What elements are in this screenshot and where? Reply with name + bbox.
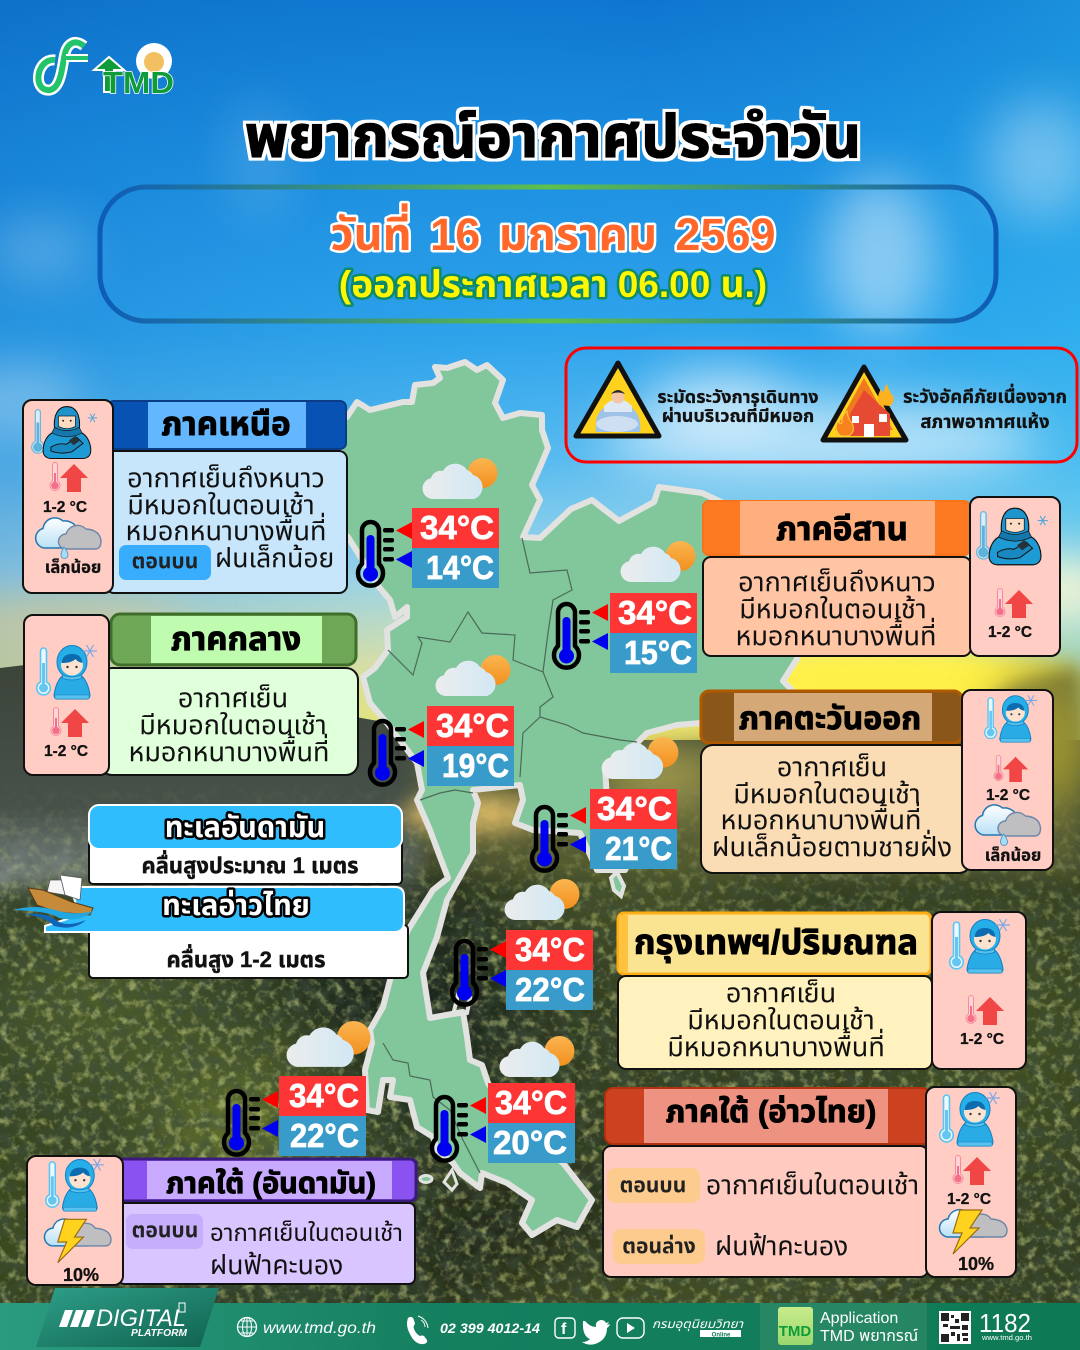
- label: light rain: เล็กน้อย: [985, 847, 1041, 865]
- temperatures: 22°C: [515, 971, 585, 1008]
- icon: cold child: [950, 919, 1010, 973]
- text: east forecast: อากาศเย็น: [777, 752, 887, 782]
- heading: northeast: [703, 501, 970, 555]
- issued time: (ออกประกาศเวลา 06.00 น.): [339, 264, 767, 305]
- card: south andaman icons: [27, 1156, 123, 1285]
- icon: thunderstorm: [44, 1219, 111, 1263]
- text: central forecast: [100, 668, 358, 775]
- cloud and sun icon: [500, 1036, 574, 1077]
- cloud and sun icon: [436, 655, 510, 696]
- temperatures: 34°C: [597, 790, 672, 827]
- heading: Gulf of Thailand: [45, 887, 404, 932]
- text: north forecast: มีหมอกในตอนเช้า: [127, 490, 315, 520]
- icon: light rain: [36, 518, 101, 558]
- phone: [407, 1316, 541, 1344]
- temperatures: [427, 706, 514, 786]
- application block: TMD พยากรณ์: [820, 1328, 918, 1345]
- digital platform badge: [36, 1288, 219, 1347]
- icon: bundled person: [977, 508, 1048, 565]
- heading: northeast: ภาคอีสาน: [776, 510, 908, 547]
- temperatures: 34°C: [436, 707, 509, 744]
- text: south gulf forecast: [603, 1146, 928, 1277]
- logo: TMD digital: TMD: [103, 65, 174, 100]
- warning text: fog: ผ่านบริเวณที่มีหมอก: [662, 403, 814, 426]
- icon: cold child: [940, 1092, 1000, 1146]
- text: central forecast: อากาศเย็น: [178, 683, 288, 713]
- text: north forecast: อากาศเย็นถึงหนาว: [127, 463, 325, 493]
- forecast block: north: [358, 458, 499, 588]
- body: Gulf wave height: [89, 925, 408, 978]
- text: north forecast: ฝนเล็กน้อย: [215, 543, 334, 573]
- label: storm chance: 10%: [958, 1254, 994, 1274]
- temperatures: 21°C: [605, 830, 672, 867]
- QR code: [939, 1311, 971, 1344]
- panel: Bangkok region: [618, 912, 1026, 1069]
- icon: temperature rise: [966, 996, 1004, 1025]
- text: north forecast: หมอกหนาบางพื้นที่: [125, 512, 327, 546]
- label: storm chance: 10%: [63, 1265, 99, 1285]
- text: south gulf forecast: อากาศเย็นในตอนเช้า: [706, 1170, 919, 1200]
- text: Bangkok forecast: มีหมอกในตอนเช้า: [687, 1005, 875, 1035]
- temperatures: 34°C: [495, 1084, 567, 1121]
- card: northeast icons: [970, 497, 1060, 656]
- card: north icons: [23, 400, 113, 593]
- temperatures: [590, 789, 677, 869]
- social icons: f: [561, 1321, 567, 1338]
- heading: Andaman sea: [89, 805, 402, 849]
- temperatures: 20°C: [493, 1124, 567, 1161]
- cloud and sun icon: [423, 458, 498, 499]
- panel: Gulf of Thailand: [13, 875, 408, 978]
- cloud and sun icon: [287, 1021, 370, 1067]
- temperatures: 34°C: [420, 509, 494, 546]
- warning text: fog: ระมัดระวังการเดินทาง: [657, 387, 819, 407]
- forecast block: northeast: [554, 541, 697, 673]
- warning panel: [566, 348, 1077, 462]
- text: south gulf forecast: ตอนบน: [620, 1174, 686, 1197]
- card: Bangkok icons: [932, 912, 1026, 1069]
- forecast block: upper south: [452, 879, 593, 1010]
- temperatures: 22°C: [290, 1117, 359, 1154]
- digital platform badge: DIGITAL: [96, 1305, 186, 1332]
- thermometer: [358, 522, 412, 586]
- panel: east region: [701, 690, 1053, 873]
- heading: Andaman sea: ทะเลอันดามัน: [165, 812, 325, 844]
- cloud and sun icon: [602, 737, 678, 779]
- label: light rain: เล็กน้อย: [45, 559, 101, 577]
- application block: TMD: [779, 1323, 811, 1340]
- website: [238, 1318, 376, 1337]
- application block: Application: [820, 1310, 898, 1327]
- heading: north: ภาคเหนือ: [161, 405, 291, 442]
- text: Bangkok forecast: มีหมอกหนาบางพื้นที่: [667, 1028, 885, 1062]
- heading: Bangkok: กรุงเทพฯ/ปริมณฑล: [634, 924, 918, 963]
- text: south andaman forecast: อากาศเย็นในตอนเช้า: [210, 1219, 403, 1247]
- text: northeast forecast: มีหมอกในตอนเช้า: [739, 594, 927, 624]
- temperatures: [610, 593, 697, 673]
- label: temperature rise: 1-2 °C: [960, 1031, 1004, 1048]
- icon: temperature rise: [50, 462, 88, 492]
- hotline 1182: www.tmd.go.th: [981, 1335, 1032, 1342]
- temperatures: 19°C: [442, 747, 509, 784]
- thermometer: [432, 1097, 486, 1161]
- panel: northeast region: [703, 497, 1060, 656]
- forecast block: south andaman: [224, 1021, 370, 1156]
- icon: cold child: [46, 1159, 104, 1211]
- text: east forecast: หมอกหนาบางพื้นที่: [720, 801, 922, 835]
- temperatures: 15°C: [624, 634, 692, 671]
- title: พยากรณ์อากาศประจำวัน: [245, 103, 861, 170]
- label: temperature rise: 1-2 °C: [43, 499, 87, 516]
- body: Gulf wave height: คลื่นสูง 1-2 เมตร: [167, 944, 325, 973]
- text: south gulf forecast: ตอนล่าง: [622, 1235, 696, 1258]
- thermometer: [370, 721, 424, 785]
- text: northeast forecast: อากาศเย็นถึงหนาว: [738, 567, 936, 597]
- icon: temperature rise: [51, 708, 89, 737]
- card: central icons: [24, 615, 109, 775]
- warning text: fire: ระวังอัคคีภัยเนื่องจาก: [903, 383, 1067, 407]
- text: Bangkok forecast: อากาศเย็น: [726, 978, 836, 1008]
- heading: south gulf: [605, 1088, 930, 1144]
- label: temperature rise: 1-2 °C: [988, 624, 1032, 641]
- temperatures: [506, 930, 593, 1010]
- footer bar: [0, 1288, 1080, 1350]
- logo: TMD digital: [38, 42, 174, 100]
- label: temperature rise: 1-2 °C: [44, 743, 88, 760]
- heading: central: ภาคกลาง: [171, 620, 301, 657]
- text: east forecast: [701, 745, 971, 873]
- body: Andaman wave height: คลื่นสูงประมาณ 1 เมตร: [141, 850, 359, 879]
- temperatures: 34°C: [618, 594, 692, 631]
- forecast block: east: [532, 737, 678, 871]
- text: Bangkok forecast: [618, 976, 932, 1069]
- heading: south andaman: ภาคใต้ (อันดามัน): [166, 1168, 376, 1200]
- thermometer: [554, 604, 608, 668]
- panel: south gulf region: [603, 1087, 1016, 1277]
- department name: กรมอุตุนิยมวิทยา: [652, 1317, 744, 1332]
- date box: [100, 187, 996, 321]
- digital platform badge: PLATFORM: [131, 1328, 188, 1339]
- thermometer: [452, 941, 506, 1005]
- temperatures: [279, 1076, 366, 1156]
- cloud and sun icon: [505, 879, 580, 920]
- forecast block: south gulf: [432, 1036, 575, 1163]
- heading: east: [701, 691, 962, 743]
- temperatures: [412, 508, 499, 588]
- temperatures: [488, 1083, 575, 1163]
- left hills: [0, 662, 430, 930]
- text: north forecast: ตอนบน: [132, 550, 198, 573]
- heading: north: [108, 401, 346, 449]
- icon: temperature rise: [994, 755, 1028, 782]
- department name: [652, 1317, 744, 1338]
- text: south andaman forecast: ตอนบน: [132, 1219, 198, 1242]
- card: east icons: [962, 690, 1053, 870]
- application block: [760, 1303, 927, 1350]
- body: Andaman wave height: [89, 840, 402, 884]
- panel: south andaman region: [27, 1156, 416, 1285]
- text: east forecast: ฝนเล็กน้อยตามชายฝั่ง: [712, 829, 952, 862]
- text: north forecast: [106, 451, 347, 593]
- temperatures: 34°C: [289, 1077, 359, 1114]
- text: south gulf forecast: ฝนฟ้าคะนอง: [715, 1231, 848, 1261]
- icon: cold child: [37, 645, 97, 699]
- department name: Online: [712, 1332, 731, 1338]
- heading: Bangkok: [618, 913, 931, 974]
- heading: central: [111, 614, 356, 665]
- icon: ship: [13, 875, 93, 928]
- website: www.tmd.go.th: [263, 1320, 376, 1337]
- map of Thailand: [340, 362, 800, 1235]
- icon: thunderstorm: [939, 1210, 1007, 1254]
- panel: Andaman sea: [89, 805, 402, 884]
- icon: temperature rise: [953, 1156, 991, 1185]
- icon: cold child: [985, 695, 1037, 742]
- warning text: fog: [657, 387, 819, 426]
- forecast block: central: [370, 655, 514, 786]
- cloud and sun icon: [621, 541, 696, 582]
- icon: fog driving warning: [576, 363, 659, 436]
- thermometer: [224, 1091, 278, 1155]
- text: central forecast: มีหมอกในตอนเช้า: [139, 710, 327, 740]
- heading: south gulf: ภาคใต้ (อ่าวไทย): [666, 1094, 876, 1129]
- panel: central region: [24, 614, 358, 775]
- warning text: fire: [903, 383, 1067, 432]
- thermometer: [532, 807, 586, 871]
- heading: south andaman: [118, 1159, 416, 1201]
- text: northeast forecast: [703, 557, 971, 656]
- social icons: [555, 1318, 644, 1345]
- card: south gulf icons: [926, 1087, 1016, 1277]
- label: temperature rise: 1-2 °C: [986, 787, 1030, 804]
- temperatures: 14°C: [426, 549, 494, 586]
- label: temperature rise: 1-2 °C: [947, 1191, 991, 1208]
- text: south andaman forecast: [118, 1203, 415, 1284]
- text: south andaman forecast: ฝนฟ้าคะนอง: [210, 1250, 343, 1280]
- hotline 1182: 1182: [979, 1308, 1031, 1338]
- icon: temperature rise: [995, 588, 1033, 618]
- text: central forecast: หมอกหนาบางพื้นที่: [128, 733, 330, 767]
- icon: bundled person: [32, 407, 97, 458]
- heading: east: ภาคตะวันออก: [739, 700, 921, 736]
- icon: fire warning: [823, 367, 906, 440]
- phone: 02 399 4012-14: [440, 1321, 541, 1336]
- text: east forecast: มีหมอกในตอนเช้า: [733, 779, 921, 809]
- warning text: fire: สภาพอากาศแห้ง: [920, 411, 1050, 432]
- text: northeast forecast: หมอกหนาบางพื้นที่: [735, 617, 937, 651]
- heading: Gulf of Thailand: ทะเลอ่าวไทย: [162, 890, 310, 922]
- date: วันที่ 16 มกราคม 2569: [330, 203, 776, 260]
- temperatures: 34°C: [515, 931, 585, 968]
- panel: north region: [23, 400, 347, 593]
- icon: light rain: [975, 805, 1040, 846]
